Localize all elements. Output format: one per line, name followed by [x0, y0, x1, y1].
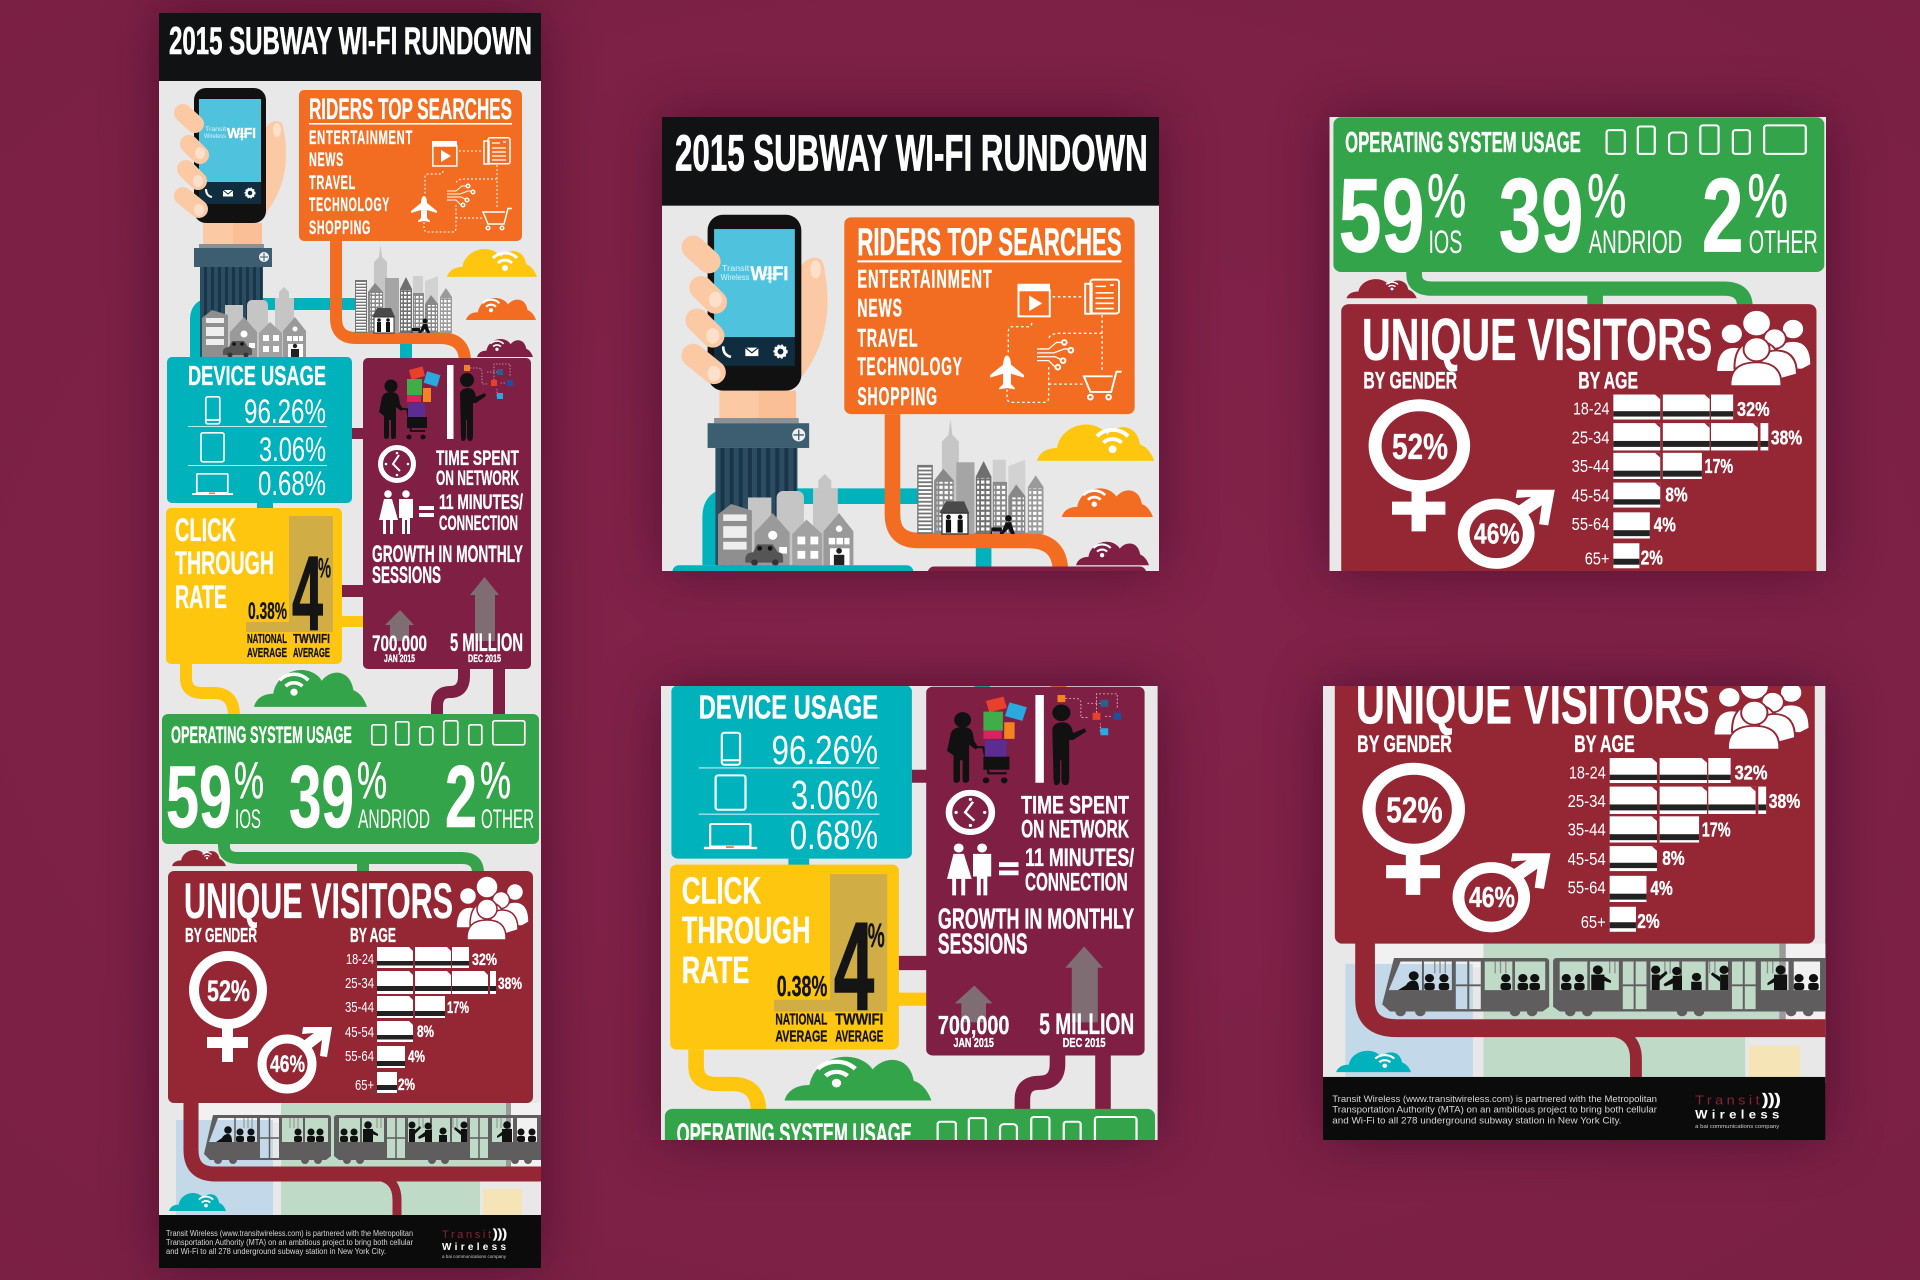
unique visitors text and chart labels: 25-34 — [345, 975, 374, 992]
crop os text: % — [1587, 161, 1626, 231]
panel heading and list: TECHNOLOGY — [309, 195, 390, 216]
crop visitors text: UNIQUE VISITORS — [1362, 308, 1712, 373]
crop visitors text: 2% — [1637, 910, 1660, 933]
click through figures: 0.38% — [248, 598, 287, 625]
crop os heading: OPERATING SYSTEM USAGE — [677, 1119, 912, 1150]
crop device usage text: 96.26% — [771, 728, 878, 772]
operating system figures: % — [234, 752, 264, 810]
crop visitors text: 55-64 — [1568, 878, 1606, 897]
crop network text: JAN 2015 — [953, 1036, 994, 1050]
click through figures: RATE — [175, 579, 227, 615]
crop click through text: % — [868, 919, 885, 954]
crop click through text: THROUGH — [682, 910, 810, 951]
crop searches text: ENTERTAINMENT — [857, 267, 993, 294]
panel heading and list: NEWS — [309, 150, 344, 171]
phone screen text: Transit — [205, 126, 226, 133]
crop visitors text: 46% — [1469, 882, 1515, 913]
panel: time spent and growth — [363, 358, 531, 669]
unique visitors text and chart labels: 8% — [417, 1022, 434, 1041]
crop searches text: RIDERS TOP SEARCHES — [857, 221, 1122, 264]
phone screen text — [204, 125, 256, 142]
crop footer text and logo: a bai communications company — [1695, 1124, 1779, 1130]
icon: city houses left — [202, 287, 306, 358]
crop network text: 11 MINUTES/ — [1025, 843, 1134, 871]
crop visitors text: 65+ — [1585, 548, 1609, 569]
crop click through text — [682, 870, 885, 1045]
crop os text: IOS — [1428, 225, 1462, 261]
crop phone screen text: Wireless — [721, 272, 749, 282]
unique visitors text and chart labels: UNIQUE VISITORS — [184, 873, 453, 929]
crop visitors text: 4% — [1650, 877, 1673, 900]
detail crop: unique visitors, train and footer — [1323, 686, 1826, 1140]
operating system figures: 2 — [445, 747, 477, 846]
crop footer text and logo: ))) — [1762, 1091, 1781, 1108]
phone screen text: Wireless — [204, 133, 227, 140]
crop click through text: TWWIFI — [835, 1011, 883, 1029]
network and session figures: CONNECTION — [439, 512, 518, 535]
operating system figures: IOS — [235, 804, 261, 834]
unique visitors text and chart labels: 4% — [408, 1047, 425, 1066]
click through figures: THROUGH — [175, 545, 274, 581]
crop os text: ANDRIOD — [1589, 225, 1682, 261]
transit wireless logo — [442, 1226, 507, 1259]
unique visitors text and chart labels: 18-24 — [346, 951, 374, 968]
crop os text: % — [1747, 161, 1788, 231]
crop visitors text: 17% — [1702, 819, 1731, 841]
crop visitors text: 25-34 — [1572, 427, 1609, 447]
crop click through text: AVERAGE — [835, 1028, 883, 1045]
full infographic strip — [159, 13, 541, 1268]
crop footer text and logo: and Wi-Fi to all 278 underground subway station in New York City. — [1332, 1116, 1621, 1126]
footer note: Transportation Authority (MTA) on an ambitious project to bring both cellular — [166, 1238, 413, 1247]
crop visitors text: 25-34 — [1568, 791, 1606, 811]
crop network text: DEC 2015 — [1063, 1036, 1106, 1050]
crop phone screen text: WIFI — [751, 263, 788, 285]
crop os text: 2 — [1702, 158, 1744, 275]
crop os text: % — [1427, 161, 1466, 231]
transit wireless logo: a bai communications company — [442, 1254, 507, 1259]
crop visitors text: BY GENDER — [1357, 731, 1452, 758]
panel: unique visitors — [168, 871, 533, 1103]
crop visitors text: 52% — [1392, 426, 1448, 466]
crop searches text: NEWS — [857, 295, 903, 322]
icon: subway train — [204, 1115, 541, 1164]
crop network text: 700,000 — [938, 1010, 1009, 1040]
panel: device usage — [167, 357, 352, 503]
unique visitors text and chart labels: BY AGE — [350, 925, 396, 947]
unique visitors text and chart labels: 52% — [207, 975, 250, 1008]
operating system figures: ANDRIOD — [358, 804, 430, 834]
crop visitors text: 8% — [1665, 484, 1688, 506]
unique visitors text and chart labels: 2% — [398, 1075, 415, 1094]
crop visitors text: 46% — [1474, 518, 1520, 550]
unique visitors text and chart labels: 38% — [498, 974, 522, 993]
crop visitors text: UNIQUE VISITORS — [1356, 670, 1710, 737]
unique visitors text and chart labels: 32% — [472, 950, 497, 969]
click through figures: AVERAGE — [247, 645, 287, 660]
crop device usage text: 3.06% — [791, 773, 878, 817]
footer note: and Wi-Fi to all 278 underground subway station in New York City. — [166, 1247, 386, 1256]
crop visitors text: 32% — [1735, 761, 1768, 784]
crop visitors text: 32% — [1737, 399, 1770, 421]
crop visitors text: BY AGE — [1578, 368, 1638, 394]
crop visitors text: 35-44 — [1572, 456, 1609, 476]
crop visitors text: 55-64 — [1572, 514, 1609, 534]
crop device usage text — [699, 689, 878, 858]
network and session figures: 11 MINUTES/ — [439, 491, 523, 514]
panel heading and list: ENTERTAINMENT — [309, 128, 413, 149]
crop phone screen text — [720, 265, 788, 280]
crop os text: 39 — [1499, 158, 1583, 275]
footer — [159, 1215, 541, 1268]
panel heading and list — [309, 93, 512, 239]
unique visitors text and chart labels: 46% — [270, 1051, 305, 1078]
unique visitors text and chart labels: 17% — [447, 998, 469, 1017]
strip background and map blocks — [159, 81, 541, 1215]
network and session figures: DEC 2015 — [468, 653, 501, 665]
click through figures: % — [318, 553, 331, 583]
crop visitors text: 17% — [1704, 456, 1733, 478]
click through figures: NATIONAL — [247, 631, 287, 646]
crop footer text and logo — [1332, 1091, 1781, 1130]
crop visitors text: 38% — [1769, 790, 1800, 813]
crop click through text: RATE — [682, 950, 749, 992]
crop click through text: AVERAGE — [775, 1028, 828, 1045]
unique visitors text and chart labels — [184, 873, 522, 1094]
network and session figures: SESSIONS — [372, 562, 441, 589]
crop device usage text: 0.68% — [790, 813, 878, 858]
unique visitors text and chart labels: 45-54 — [345, 1024, 374, 1041]
panel heading and list: SHOPPING — [309, 218, 371, 239]
crop network text: GROWTH IN MONTHLY — [938, 904, 1134, 935]
panel heading and list: TRAVEL — [309, 173, 356, 194]
crop searches text — [857, 221, 1122, 411]
panel heading and list: RIDERS TOP SEARCHES — [309, 93, 512, 126]
crop footer text and logo: Transit Wireless (www.transitwireless.com) is partnered with the Metropolitan — [1332, 1094, 1657, 1105]
crop visitors text: 45-54 — [1568, 849, 1606, 869]
crop os text: OTHER — [1749, 225, 1818, 261]
crop searches text: SHOPPING — [857, 384, 938, 411]
crop visitors text — [1356, 670, 1800, 933]
network and session figures: 700,000 — [372, 631, 427, 656]
crop footer text and logo: Wireless — [1695, 1108, 1779, 1121]
title: 2015 SUBWAY WI-FI RUNDOWN — [169, 20, 532, 63]
network and session figures: JAN 2015 — [384, 653, 415, 665]
crop click through text: 4 — [834, 896, 874, 1036]
crop network text: 5 MILLION — [1039, 1007, 1134, 1041]
crop visitors text: 18-24 — [1569, 762, 1606, 782]
click through figures: AVERAGE — [293, 645, 330, 660]
crop title: 2015 SUBWAY WI-FI RUNDOWN — [675, 124, 1148, 181]
panel: riders top searches — [299, 90, 522, 241]
crop click through text: CLICK — [682, 870, 761, 912]
crop searches text: TECHNOLOGY — [857, 354, 963, 381]
network and session figures: TIME SPENT — [436, 447, 519, 470]
operating system figures: % — [357, 752, 387, 810]
operating system figures: 39 — [289, 747, 354, 846]
unique visitors text and chart labels: 35-44 — [345, 999, 374, 1016]
crop visitors text: 4% — [1654, 514, 1676, 536]
pipes connecting panels — [186, 241, 541, 1215]
crop os text — [1340, 132, 1817, 254]
panel: click through rate — [166, 508, 342, 664]
crop visitors text: BY AGE — [1574, 731, 1635, 758]
device usage figures: 3.06% — [259, 431, 326, 469]
crop network text: ON NETWORK — [1021, 814, 1129, 843]
detail crop: device usage, click through, sessions — [661, 686, 1158, 1140]
device usage figures: 0.68% — [258, 465, 326, 503]
operating system figures: OTHER — [481, 804, 534, 834]
device usage figures: DEVICE USAGE — [188, 360, 326, 391]
crop network text — [938, 791, 1134, 1050]
crop visitors text: 45-54 — [1572, 485, 1609, 505]
crop visitors text: 35-44 — [1568, 819, 1606, 839]
device usage figures: 96.26% — [244, 393, 326, 431]
crop phone screen text: Transit — [722, 263, 750, 273]
phone screen text: WIFI — [227, 125, 256, 142]
crop footer text and logo: Transportation Authority (MTA) on an ambitious project to bring both cellular — [1332, 1105, 1658, 1115]
operating system figures: % — [480, 752, 511, 810]
network and session figures: GROWTH IN MONTHLY — [372, 541, 523, 568]
detail crop: operating system and unique visitors — [1330, 117, 1826, 571]
crop network text: TIME SPENT — [1021, 791, 1129, 819]
clouds with wifi symbols — [169, 249, 537, 1211]
click through figures — [175, 512, 331, 660]
transit wireless logo: ))) — [493, 1226, 507, 1241]
panel: operating system usage — [162, 714, 539, 846]
crop click through text: 0.38% — [777, 971, 827, 1003]
footer note: Transit Wireless (www.transitwireless.com) is partnered with the Metropolitan — [166, 1229, 413, 1238]
device usage figures — [188, 360, 326, 503]
unique visitors text and chart labels: 55-64 — [345, 1048, 374, 1065]
crop visitors text — [1362, 308, 1802, 569]
crop visitors text: 52% — [1386, 790, 1443, 830]
click through figures: 4 — [292, 535, 323, 653]
crop visitors text: 38% — [1771, 427, 1802, 449]
crop visitors text: 8% — [1662, 847, 1685, 870]
operating system figures — [166, 722, 534, 846]
operating system figures: 59 — [166, 747, 232, 846]
unique visitors text and chart labels: 65+ — [355, 1077, 374, 1094]
crop visitors text: 65+ — [1581, 912, 1606, 932]
transit wireless logo: Transit — [442, 1229, 491, 1241]
crop network text: CONNECTION — [1025, 868, 1128, 896]
crop os text: OPERATING SYSTEM USAGE — [1345, 127, 1581, 158]
crop searches text: TRAVEL — [857, 325, 919, 352]
click through figures: TWWIFI — [293, 631, 330, 646]
crop visitors text: BY GENDER — [1363, 368, 1457, 394]
network and session figures: ON NETWORK — [436, 467, 519, 490]
crop os text: 59 — [1339, 158, 1425, 275]
network and session figures: 5 MILLION — [450, 629, 523, 657]
title bar — [159, 13, 541, 81]
transit wireless logo: Wireless — [442, 1242, 506, 1253]
detail crop: title and top searches — [662, 117, 1159, 571]
crop device usage text: DEVICE USAGE — [699, 689, 878, 726]
unique visitors text and chart labels: BY GENDER — [185, 925, 257, 947]
crop network text: SESSIONS — [938, 929, 1028, 960]
crop click through text: NATIONAL — [775, 1011, 827, 1029]
footer note — [166, 1229, 413, 1256]
icon: city skyline right — [355, 245, 452, 333]
network and session figures — [372, 447, 523, 665]
operating system figures: OPERATING SYSTEM USAGE — [171, 722, 352, 749]
click through figures: CLICK — [175, 512, 236, 548]
crop visitors text: 18-24 — [1573, 399, 1609, 419]
icon: hand holding smartphone — [183, 88, 286, 357]
crop footer text and logo: Transit — [1695, 1093, 1760, 1107]
crop visitors text: 2% — [1641, 548, 1663, 569]
